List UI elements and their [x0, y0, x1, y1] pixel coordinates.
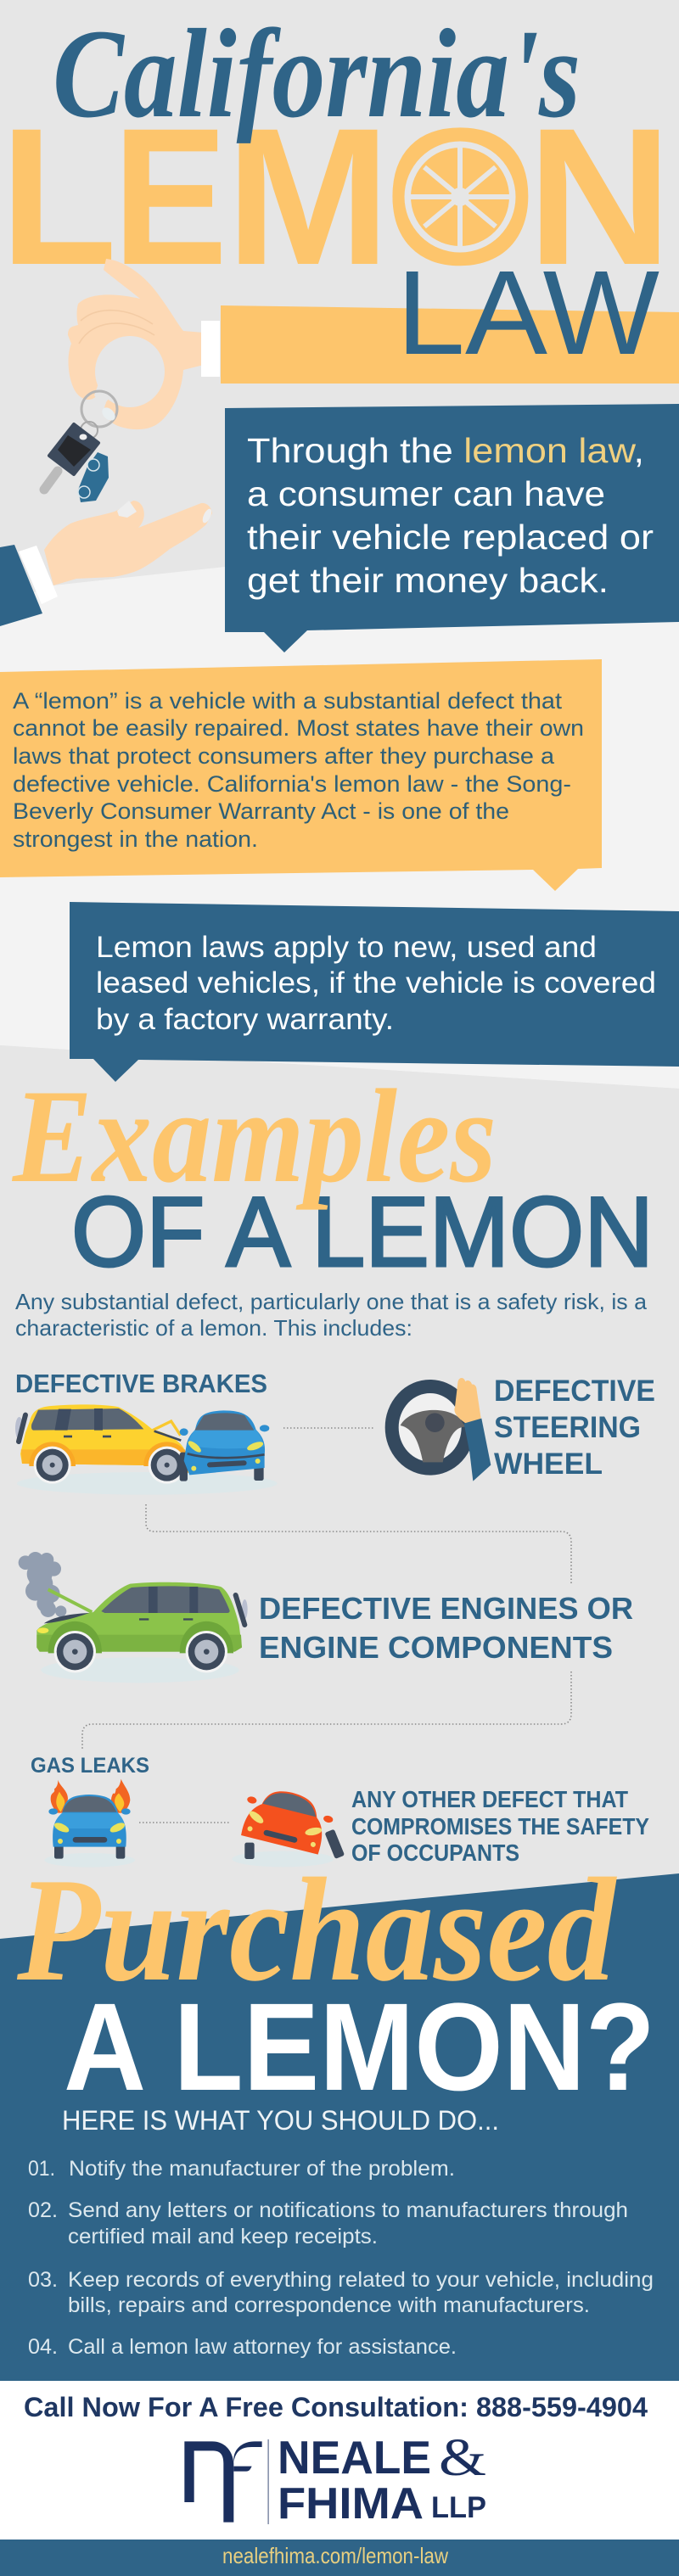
callout: what is a lemon: [0, 659, 602, 891]
numbered action list: 03.: [28, 2268, 58, 2292]
Purchased script heading: Purchased: [16, 1847, 617, 2012]
logo: Neale & Fhima LLP: LLP: [431, 2491, 486, 2524]
numbered action list: bills, repairs and correspondence with manufacturers.: [68, 2293, 590, 2317]
callout: through the lemon law: Through the lemon law ,: [247, 431, 644, 470]
LEMON heading with lemon-slice O: M: [226, 87, 390, 305]
LEMON heading with lemon-slice O: E: [113, 87, 227, 305]
label: defective steering wheel: DEFECTIVE: [494, 1375, 655, 1408]
numbered action list: Call a lemon law attorney for assistance.: [68, 2335, 457, 2359]
lower gray section background: [0, 1045, 679, 1952]
connector: brakes to engines: [146, 1504, 571, 1584]
connector: brakes to steering: [283, 1427, 373, 1429]
callout: what is a lemon: cannot be easily repaired. Most states have their own: [13, 715, 584, 741]
icon: yellow and blue car collision: [15, 1404, 278, 1495]
label: any other defect: COMPROMISES THE SAFETY: [351, 1813, 649, 1840]
panel: website footer bar: nealefhima.com/lemon-law: [222, 2543, 448, 2568]
callout: lemon laws apply: [70, 902, 679, 1082]
logo: Neale & Fhima LLP: NEALE: [278, 2431, 431, 2484]
callout: what is a lemon: laws that protect consumers after they purchase a: [13, 743, 555, 769]
Examples script heading: Examples: [11, 1062, 497, 1211]
label: any other defect: ANY OTHER DEFECT THAT: [351, 1786, 628, 1812]
LEMON heading with lemon-slice O: O: [384, 87, 536, 305]
label: defective engines: DEFECTIVE ENGINES OR: [259, 1591, 633, 1626]
subheading: what you should do: HERE IS WHAT YOU SHOULD DO...: [62, 2105, 499, 2136]
callout: what is a lemon: A “lemon” is a vehicle with a substantial defect that: [13, 688, 563, 714]
panel: blue action section background: [0, 1873, 679, 2381]
California's script title: California's: [53, 3, 581, 144]
callout: lemon laws apply: leased vehicles, if the vehicle is covered: [96, 966, 656, 1000]
connector: gas leaks to other defects: [139, 1822, 230, 1823]
label: gas leaks: GAS LEAKS: [31, 1754, 149, 1778]
OF A LEMON heading: OF A LEMON: [71, 1176, 654, 1287]
panel: white contact footer: [0, 2381, 679, 2540]
callout: what is a lemon: defective vehicle. California's lemon law - the Song-: [13, 771, 571, 797]
label: defective brakes: DEFECTIVE BRAKES: [15, 1369, 267, 1398]
label: defective engines: [259, 1591, 633, 1665]
logo: Neale & Fhima LLP: &: [439, 2429, 486, 2487]
numbered action list: Notify the manufacturer of the problem.: [69, 2157, 455, 2181]
connector: engines to gas leaks: [82, 1672, 571, 1750]
callout: what is a lemon: strongest in the nation.: [13, 826, 258, 852]
yellow band: [221, 305, 679, 384]
icon: hand holding keys: [44, 259, 220, 502]
LEMON heading with lemon-slice O: N: [527, 87, 672, 305]
panel: website footer bar: [0, 2540, 679, 2576]
icon: blue car with flames: [44, 1779, 135, 1868]
numbered action list: certified mail and keep receipts.: [68, 2225, 378, 2248]
label: defective steering wheel: [494, 1375, 655, 1481]
LEMON heading with lemon-slice O: L: [0, 87, 117, 305]
callout: through the lemon law: [225, 404, 679, 652]
numbered action list: 04.: [28, 2335, 58, 2359]
numbered action list: 02.: [28, 2198, 58, 2222]
numbered action list: Send any letters or notifications to manufacturers through: [68, 2198, 628, 2222]
callout: through the lemon law: a consumer can have: [247, 474, 605, 513]
icon: green car with smoke: [19, 1552, 248, 1683]
callout: through the lemon law: get their money back.: [247, 561, 609, 600]
LEMON heading with lemon-slice O: [0, 87, 672, 305]
label: any other defect: OF OCCUPANTS: [351, 1840, 519, 1866]
callout: through the lemon law: their vehicle replaced or: [247, 518, 654, 557]
call to action phone number: Call Now For A Free Consultation: 888-559-4904: [24, 2392, 648, 2422]
callout: lemon laws apply: by a factory warranty.: [96, 1003, 394, 1036]
intro text for examples: characteristic of a lemon. This includes:: [15, 1315, 412, 1341]
label: any other defect: [351, 1786, 649, 1866]
icon: red car missing wheel: [232, 1783, 345, 1867]
numbered action list: Keep records of everything related to your vehicle, including: [68, 2268, 654, 2292]
label: defective steering wheel: WHEEL: [494, 1448, 603, 1481]
label: defective engines: ENGINE COMPONENTS: [259, 1630, 613, 1665]
intro text for examples: Any substantial defect, particularly one that is a safety risk, is a: [15, 1289, 648, 1314]
intro text for examples: [15, 1289, 648, 1341]
logo: Neale & Fhima LLP: [184, 2429, 486, 2528]
label: defective steering wheel: STEERING: [494, 1411, 641, 1444]
icon: open receiving hand: [0, 501, 213, 626]
icon: steering wheel with raised hand: [392, 1378, 491, 1481]
callout: what is a lemon: Beverly Consumer Warranty Act - is one of the: [13, 798, 509, 824]
LAW heading: LAW: [396, 245, 659, 379]
numbered action list: [28, 2157, 654, 2359]
numbered action list: 01.: [28, 2157, 55, 2181]
logo: Neale & Fhima LLP: FHIMA: [278, 2479, 424, 2528]
callout: lemon laws apply: Lemon laws apply to new, used and: [96, 931, 597, 964]
